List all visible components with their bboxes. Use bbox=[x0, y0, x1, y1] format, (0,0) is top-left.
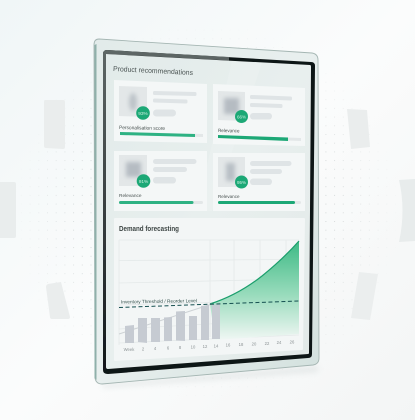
skeleton pill bbox=[153, 177, 176, 184]
progress bar bbox=[119, 201, 203, 204]
skeleton pill bbox=[250, 113, 272, 120]
skeleton lines bbox=[252, 96, 290, 106]
threshold label: Inventory Threshold / Reorder Level bbox=[121, 298, 197, 304]
bars bbox=[125, 304, 220, 343]
panel: lower left bbox=[46, 282, 70, 319]
historic line bbox=[119, 304, 212, 334]
product image bbox=[218, 91, 245, 121]
score badge bbox=[136, 106, 150, 120]
label: Relevance bbox=[218, 194, 240, 200]
axis labels: 8 bbox=[179, 345, 182, 350]
card: relevance 1 bbox=[213, 84, 305, 146]
title: Product recommendations bbox=[113, 65, 194, 77]
score badge bbox=[137, 174, 150, 188]
tablet bezel bbox=[103, 50, 315, 374]
label: Relevance bbox=[218, 128, 240, 134]
axis labels: 14 bbox=[214, 344, 219, 348]
forecast line bbox=[210, 241, 299, 304]
progress bar bbox=[120, 132, 203, 137]
product image bbox=[218, 157, 245, 187]
card: personalization score: 93% bbox=[138, 111, 149, 117]
card: relevance 3: 95% bbox=[237, 180, 246, 185]
bezel top highlight bbox=[103, 50, 229, 370]
product image bbox=[119, 86, 147, 117]
axis labels: 22 bbox=[265, 341, 270, 346]
axis labels: 6 bbox=[167, 346, 170, 350]
axis labels: 24 bbox=[277, 340, 282, 345]
panel: middle right bbox=[399, 179, 415, 242]
axis labels: 10 bbox=[191, 344, 196, 350]
product image bbox=[119, 155, 147, 186]
progress bar bbox=[218, 135, 301, 141]
chart grid bbox=[119, 240, 299, 345]
score badge bbox=[235, 110, 248, 123]
axis labels bbox=[124, 340, 295, 352]
axis labels: 26 bbox=[290, 340, 295, 344]
axis labels: 20 bbox=[252, 342, 257, 346]
axis labels: 2 bbox=[142, 346, 145, 352]
axis labels: 4 bbox=[154, 346, 157, 351]
progress bar bbox=[218, 201, 301, 204]
tablet left edge bbox=[94, 44, 96, 380]
label: Personalisation score bbox=[119, 125, 165, 132]
skeleton lines bbox=[250, 161, 292, 166]
skeleton lines bbox=[153, 159, 196, 164]
card: relevance 3 bbox=[213, 153, 305, 211]
card: relevance 1: 66% bbox=[237, 114, 246, 120]
card: personalization score bbox=[114, 80, 207, 143]
tablet bbox=[94, 39, 319, 384]
skeleton pill bbox=[153, 110, 176, 116]
tablet screen bbox=[106, 54, 311, 369]
axis labels: 16 bbox=[226, 342, 231, 348]
panel: demand forecasting bbox=[114, 218, 305, 361]
skeleton lines bbox=[154, 92, 195, 102]
panel: lower right bbox=[351, 272, 378, 320]
screen reflection bbox=[196, 61, 262, 211]
tablet frame bbox=[94, 39, 319, 384]
tablet shadow bbox=[100, 366, 318, 388]
floating glass panels bbox=[0, 100, 415, 320]
panel: middle left bbox=[0, 182, 16, 238]
label: Relevance bbox=[119, 193, 142, 199]
skeleton pill bbox=[250, 178, 272, 185]
forecast area bbox=[210, 241, 299, 340]
score badge bbox=[235, 176, 248, 188]
heading: Demand forecasting bbox=[119, 224, 179, 233]
axis labels: 12 bbox=[203, 344, 208, 349]
axis labels: Week bbox=[124, 347, 135, 352]
card: relevance 2: 91% bbox=[139, 179, 149, 185]
axis labels: 18 bbox=[239, 342, 244, 347]
panel: upper right bbox=[347, 109, 370, 149]
panel: upper left bbox=[44, 100, 65, 149]
dot grid bbox=[30, 38, 387, 387]
threshold line bbox=[119, 301, 299, 308]
card: relevance 2 bbox=[114, 151, 207, 211]
